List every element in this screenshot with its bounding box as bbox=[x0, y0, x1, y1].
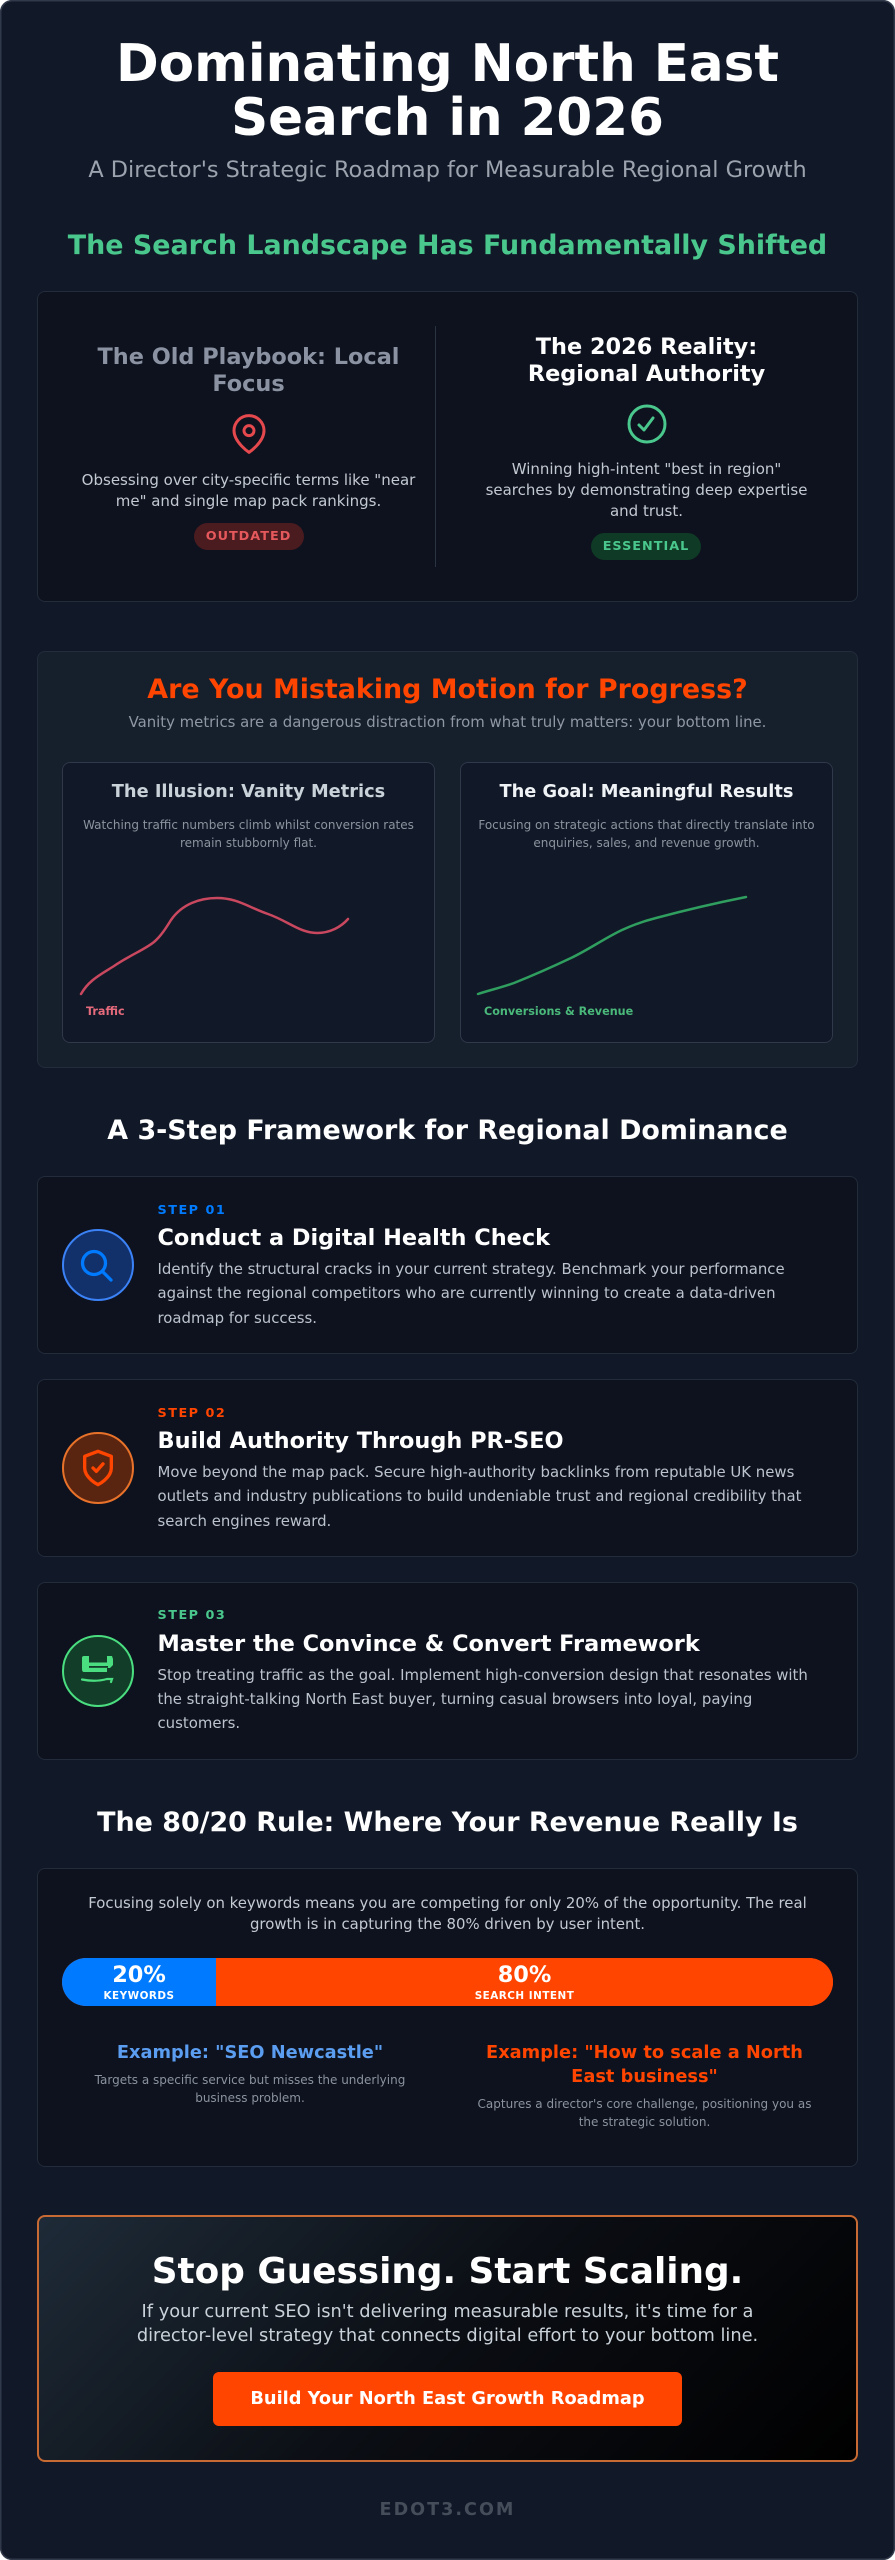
example: how to scale bbox=[478, 2042, 811, 2129]
badge: essential bbox=[591, 533, 701, 560]
bar segment: 80% search intent bbox=[216, 1958, 833, 2006]
panel: step 2 bbox=[37, 1379, 858, 1557]
text: illusion description: remain stubbornly flat. bbox=[180, 836, 317, 850]
text: 2026 reality description: and trust. bbox=[610, 502, 683, 520]
value: 80%: 80% bbox=[498, 1962, 551, 1988]
icon: shield check bbox=[62, 1432, 134, 1504]
text: illusion description: Watching traffic numbers climb whilst conversion rates bbox=[83, 818, 414, 832]
heading: old playbook: The Old Playbook: Local bbox=[98, 344, 399, 370]
heading: 2026 reality: Regional Authority bbox=[528, 360, 765, 386]
text: step 3 description: Stop treating traffic as the goal. Implement high-conversion design that resonates with bbox=[158, 1666, 808, 1684]
label: step 01: STEP 01 bbox=[158, 1202, 226, 1218]
text: cta body: director-level strategy that connects digital effort to your bottom line. bbox=[137, 2325, 758, 2346]
heading: stop guessing: Stop Guessing. Start Scaling. bbox=[152, 2250, 743, 2292]
text: 2026 reality description bbox=[486, 460, 807, 520]
heading: example 2: East business" bbox=[571, 2066, 718, 2087]
panel: step 3 bbox=[37, 1582, 858, 1760]
text: example 1 description: Targets a specific service but misses the underlying bbox=[95, 2073, 405, 2087]
title: Search in 2026 bbox=[231, 88, 664, 148]
text: old playbook description bbox=[82, 470, 416, 510]
text: old playbook description: me" and single map pack rankings. bbox=[116, 492, 381, 510]
panel: old playbook vs 2026 reality bbox=[37, 291, 858, 602]
heading: digital health check: Conduct a Digital Health Check bbox=[158, 1225, 550, 1251]
label: step 03: STEP 03 bbox=[158, 1608, 226, 1623]
column: 2026 reality bbox=[486, 334, 807, 560]
bar segment: 20% keywords bbox=[62, 1958, 216, 2006]
text: illusion description bbox=[83, 818, 414, 850]
text: step 1 description: roadmap for success. bbox=[158, 1309, 317, 1327]
label: keywords: KEYWORDS bbox=[103, 1990, 175, 2002]
heading: convince and convert: Master the Convince & Convert Framework bbox=[158, 1630, 700, 1656]
heading: 2026 reality: The 2026 Reality: bbox=[536, 334, 757, 360]
text: old playbook description: Obsessing over city-specific terms like "near bbox=[82, 470, 415, 488]
text: cta body: If your current SEO isn't delivering measurable results, it's time for a bbox=[142, 2301, 753, 2322]
icon: magnifying glass bbox=[62, 1229, 134, 1301]
text: step 1 description: Identify the structural cracks in your current strategy. Benchmark your performance bbox=[158, 1260, 785, 1278]
title: Dominating North East bbox=[116, 34, 779, 94]
text: step 2 description bbox=[158, 1463, 802, 1530]
divider between columns bbox=[435, 326, 436, 567]
icon: map pin bbox=[232, 414, 266, 454]
text: 2026 reality description: searches by demonstrating deep expertise bbox=[486, 480, 807, 498]
text: goal description: enquiries, sales, and revenue growth. bbox=[533, 836, 760, 850]
text: example 2 description bbox=[478, 2097, 811, 2129]
value: 20%: 20% bbox=[112, 1962, 166, 1988]
heading: 3-step framework: A 3-Step Framework for Regional Dominance bbox=[107, 1115, 788, 1146]
button: growth roadmap bbox=[213, 2372, 682, 2426]
text: example 2 description: the strategic solution. bbox=[579, 2115, 710, 2129]
heading: old playbook bbox=[98, 344, 399, 396]
text: step 1 description: against the regional competitors who are currently winning to create a data-driven bbox=[158, 1284, 776, 1302]
card: the goal bbox=[460, 762, 833, 1043]
button: growth roadmap: Build Your North East Growth Roadmap bbox=[250, 2388, 645, 2409]
label: search intent: SEARCH INTENT bbox=[475, 1990, 574, 2002]
text: 80/20 intro: growth is in capturing the 80% driven by user intent. bbox=[250, 1914, 645, 1932]
text: 80/20 intro bbox=[88, 1894, 807, 1932]
heading: pr-seo: Build Authority Through PR-SEO bbox=[158, 1428, 564, 1454]
footer: edot3.com: EDOT3.COM bbox=[380, 2500, 515, 2520]
text: step 1 description bbox=[158, 1260, 785, 1327]
heading: example 1: Example: "SEO Newcastle" bbox=[117, 2042, 383, 2063]
heading: example 2 bbox=[486, 2042, 803, 2087]
subtitle: A Director's Strategic Roadmap for Measurable Regional Growth bbox=[88, 157, 807, 183]
text: step 2 description: search engines reward. bbox=[158, 1512, 331, 1530]
heading: vanity metrics: The Illusion: Vanity Metrics bbox=[112, 781, 385, 802]
icon: check circle bbox=[628, 404, 666, 444]
line chart: conversions and revenue bbox=[476, 896, 748, 996]
example: seo newcastle bbox=[94, 2042, 405, 2105]
text: step 3 description bbox=[158, 1666, 808, 1732]
heading: 80/20 rule: The 80/20 Rule: Where Your Revenue Really Is bbox=[97, 1807, 798, 1838]
text: 80/20 intro: Focusing solely on keywords means you are competing for only 20% of the opportunity. The real bbox=[88, 1894, 807, 1912]
heading: meaningful results: The Goal: Meaningful Results bbox=[500, 781, 794, 802]
text: step 3 description: customers. bbox=[158, 1714, 240, 1732]
column: old playbook bbox=[82, 344, 416, 550]
badge: outdated: OUTDATED bbox=[206, 529, 291, 544]
label: step 02: STEP 02 bbox=[158, 1406, 226, 1420]
text: vanity metrics intro: Vanity metrics are a dangerous distraction from what truly matters: your bottom line. bbox=[129, 713, 766, 731]
chart label: traffic: Traffic bbox=[86, 1005, 125, 1018]
title bbox=[116, 34, 779, 148]
bar chart: 20/80 split bbox=[62, 1958, 833, 2006]
panel: call to action bbox=[37, 2215, 858, 2462]
text: example 2 description: Captures a director's core challenge, positioning you as bbox=[478, 2097, 811, 2111]
text: step 2 description: outlets and industry publications to build undeniable trust and regional credibility that bbox=[158, 1487, 801, 1505]
heading: 2026 reality bbox=[528, 334, 765, 386]
text: cta body bbox=[137, 2301, 758, 2346]
panel: 80/20 rule bbox=[37, 1868, 858, 2167]
panel: motion vs progress bbox=[37, 651, 858, 1068]
badge: essential: ESSENTIAL bbox=[603, 539, 689, 554]
text: 2026 reality description: Winning high-intent "best in region" bbox=[512, 460, 781, 478]
heading: old playbook: Focus bbox=[212, 370, 285, 396]
heading: mistaking motion: Are You Mistaking Motion for Progress? bbox=[147, 674, 748, 705]
text: example 1 description bbox=[94, 2073, 405, 2105]
text: step 2 description: Move beyond the map pack. Secure high-authority backlinks from reputable UK news bbox=[158, 1463, 794, 1481]
text: example 1 description: business problem. bbox=[195, 2091, 305, 2105]
badge: outdated bbox=[194, 523, 304, 550]
icon: convert couch bbox=[62, 1634, 134, 1706]
chart label: conversions and revenue: Conversions & Revenue bbox=[484, 1005, 633, 1018]
text: step 3 description: the straight-talking North East buyer, turning casual browsers into loyal, paying bbox=[158, 1690, 752, 1708]
heading: example 2: Example: "How to scale a North bbox=[486, 2042, 803, 2063]
card: the illusion bbox=[62, 762, 435, 1043]
text: goal description bbox=[478, 818, 815, 850]
heading: search landscape: The Search Landscape Has Fundamentally Shifted bbox=[68, 230, 827, 261]
text: goal description: Focusing on strategic actions that directly translate into bbox=[478, 818, 815, 832]
line chart: traffic bbox=[80, 896, 350, 996]
panel: step 1 bbox=[37, 1176, 858, 1354]
